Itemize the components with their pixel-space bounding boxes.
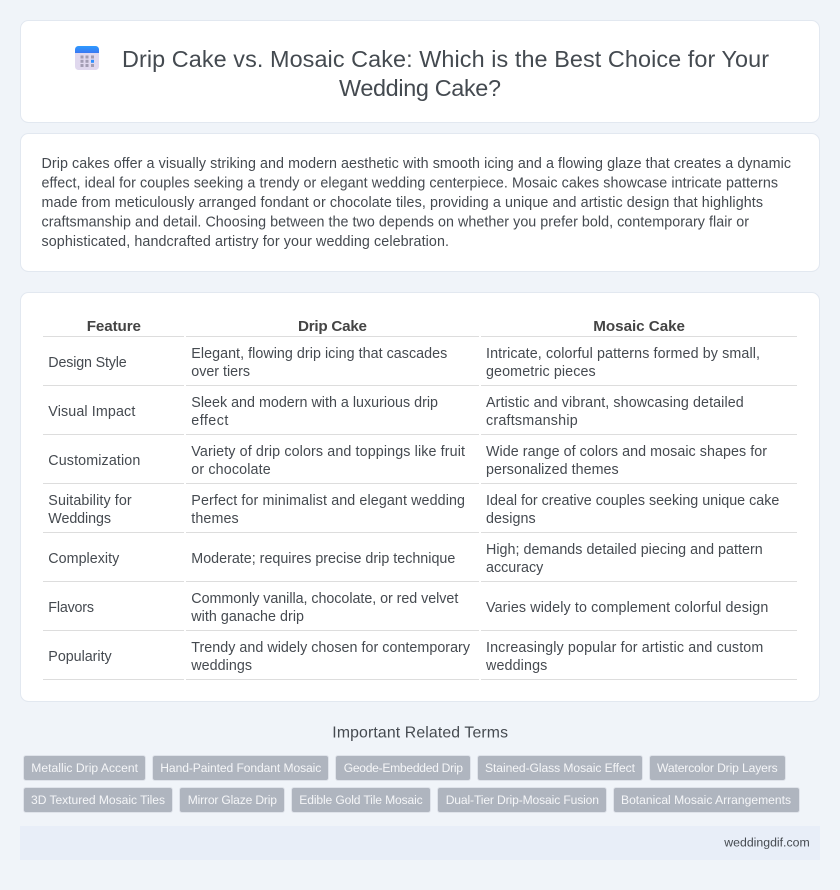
- footer: weddingdif.com: [723, 836, 810, 850]
- row: complexity: High; demands detailed piecing and pattern: [486, 542, 763, 558]
- row: design style: Intricate, colorful patterns formed by small,: [486, 346, 760, 362]
- icon: calendar: [75, 46, 99, 70]
- row: design style: Elegant, flowing drip icing that cascades: [191, 346, 447, 362]
- heading: important related terms: Important Related Terms: [332, 724, 508, 742]
- row: flavors: Commonly vanilla, chocolate, or red velvet: [191, 591, 458, 607]
- row: visual impact: Sleek and modern with a luxurious drip: [191, 395, 438, 411]
- row: popularity: weddings: [485, 658, 547, 674]
- row: visual impact: [48, 395, 744, 429]
- tags: related terms: Hand-Painted Fondant Mosaic: [160, 761, 321, 775]
- tags: related terms: Metallic Drip Accent: [31, 761, 139, 775]
- row: flavors: Flavors: [48, 600, 94, 616]
- row: design style: over tiers: [191, 364, 250, 380]
- row: suitability for weddings: designs: [486, 511, 536, 527]
- row: customization: Customization: [48, 453, 140, 469]
- intro text: Drip cakes offer a visually striking and modern aesthetic with smooth icing and a flowing glaze that creates a dynamic: [42, 156, 791, 172]
- row: suitability for weddings: themes: [191, 511, 239, 527]
- title: Drip Cake vs. Mosaic Cake: Which is the Best Choice for Your: [122, 46, 769, 72]
- row: complexity: accuracy: [486, 560, 544, 576]
- table header: Feature: [87, 318, 141, 335]
- row: popularity: weddings: [190, 658, 252, 674]
- row: customization: or chocolate: [191, 462, 271, 478]
- row: flavors: [48, 591, 768, 625]
- row: visual impact: effect: [191, 413, 228, 429]
- footer: [20, 826, 820, 860]
- row: popularity: Trendy and widely chosen for contemporary: [191, 640, 471, 656]
- intro text: made from meticulously arranged fondant or chocolate tiles, providing a unique and artistic design that highlights: [42, 195, 763, 211]
- tags: related terms: Botanical Mosaic Arrangements: [621, 793, 791, 807]
- row: suitability for weddings: [48, 493, 779, 527]
- row: customization: [48, 444, 767, 478]
- panel: comparison table: [20, 292, 820, 702]
- title: Wedding Cake?: [339, 75, 501, 101]
- row: suitability for weddings: Ideal for creative couples seeking unique cake: [486, 493, 779, 509]
- row: suitability for weddings: Perfect for minimalist and elegant wedding: [191, 493, 465, 509]
- panel: introduction: [20, 134, 820, 272]
- row: design style: geometric pieces: [486, 364, 596, 380]
- intro text: [42, 156, 791, 250]
- row: flavors: with ganache drip: [190, 609, 304, 625]
- intro text: sophisticated, handcrafted artistry for your wedding celebration.: [42, 234, 449, 250]
- panel: header: [20, 20, 820, 122]
- row: popularity: Popularity: [48, 649, 113, 665]
- row: suitability for weddings: Weddings: [48, 511, 111, 527]
- row: complexity: [48, 542, 763, 576]
- intro text: effect, ideal for couples seeking a trendy or elegant wedding centerpiece. Mosaic cakes showcase intricate patterns: [42, 176, 778, 192]
- table header: Mosaic Cake: [593, 318, 685, 335]
- row: visual impact: craftsmanship: [486, 413, 578, 429]
- tags: related terms: Mirror Glaze Drip: [188, 793, 277, 807]
- title: [122, 46, 769, 101]
- row: complexity: Complexity: [48, 551, 120, 567]
- table header: Drip Cake: [298, 318, 367, 335]
- row: visual impact: Artistic and vibrant, showcasing detailed: [486, 395, 744, 411]
- tags: related terms: Watercolor Drip Layers: [657, 761, 778, 775]
- row: customization: Wide range of colors and mosaic shapes for: [486, 444, 767, 460]
- row: complexity: Moderate; requires precise drip technique: [191, 551, 455, 567]
- row: customization: Variety of drip colors and toppings like fruit: [191, 444, 465, 460]
- intro text: craftsmanship and detail. Choosing between the two depends on whether you prefer bold, contemporary flair or: [42, 214, 749, 230]
- row: popularity: [48, 640, 763, 674]
- tags: related terms: Edible Gold Tile Mosaic: [299, 793, 423, 807]
- row: customization: personalized themes: [486, 462, 619, 478]
- row: popularity: Increasingly popular for artistic and custom: [486, 640, 763, 656]
- tags: related terms: Stained-Glass Mosaic Effect: [485, 761, 636, 775]
- tags: related terms: 3D Textured Mosaic Tiles: [31, 793, 165, 807]
- row: design style: [48, 346, 760, 380]
- tags: related terms: [24, 756, 800, 812]
- row: visual impact: Visual Impact: [48, 404, 135, 420]
- table header: [87, 318, 685, 335]
- row: suitability for weddings: Suitability for: [48, 493, 132, 509]
- tags: related terms: Geode-Embedded Drip: [344, 761, 463, 775]
- row: design style: Design Style: [48, 355, 127, 371]
- tags: related terms: Dual-Tier Drip-Mosaic Fusion: [446, 793, 599, 807]
- row: flavors: Varies widely to complement colorful design: [486, 600, 768, 616]
